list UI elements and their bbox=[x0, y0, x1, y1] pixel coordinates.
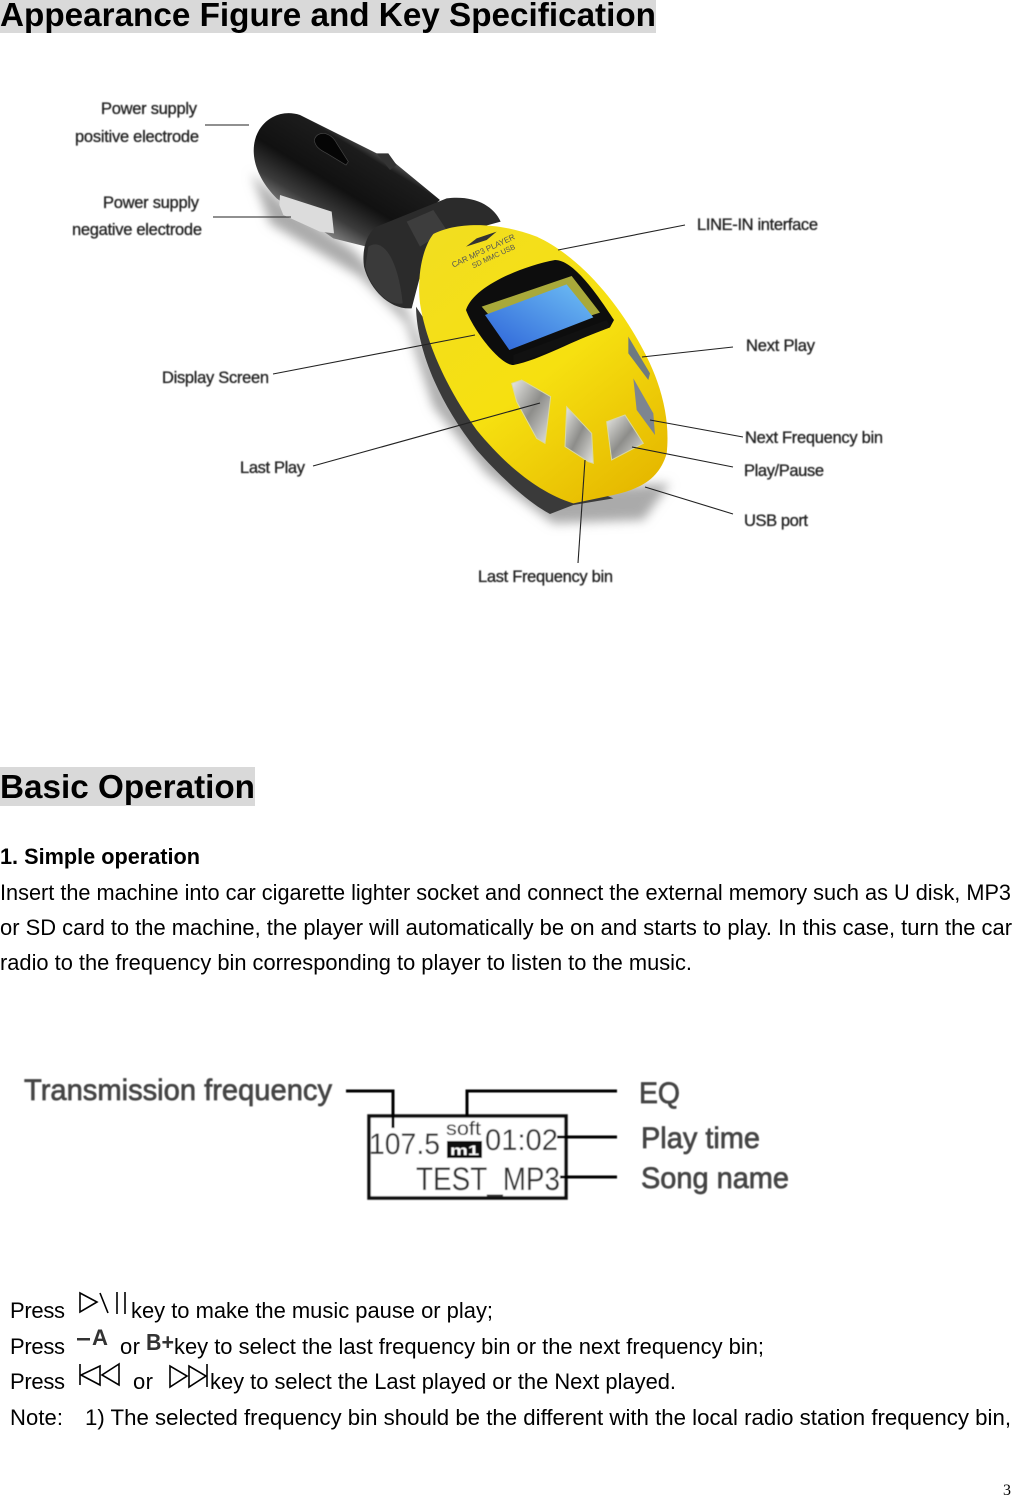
callout labels: Power supply bbox=[103, 194, 200, 212]
illustration: yellow car MP3 player bbox=[252, 113, 670, 523]
label: Play time: Play time bbox=[641, 1122, 760, 1155]
callout labels: Power supply bbox=[101, 100, 198, 118]
instruction: track keys bbox=[10, 1364, 676, 1394]
text block: simple operation: or SD card to the machine, the player will automatically be on and starts to play. In this case, turn the car bbox=[0, 915, 1012, 940]
instruction: frequency keys: A bbox=[92, 1325, 108, 1350]
instruction: track keys: key to select the Last played or the Next played. bbox=[210, 1369, 676, 1394]
instruction: play or pause: key to make the music pause or play; bbox=[131, 1298, 493, 1323]
LCD screen: 107.5 bbox=[369, 1128, 440, 1161]
label: EQ: EQ bbox=[639, 1077, 680, 1110]
label: Song name: Song name bbox=[641, 1162, 789, 1195]
figure: annotated device photo bbox=[72, 100, 883, 586]
callout labels: Play/Pause bbox=[744, 462, 824, 480]
callout labels bbox=[72, 100, 883, 586]
instruction: track keys: Press bbox=[10, 1369, 65, 1394]
illustration: yellow car MP3 player: CAR MP3 PLAYER bbox=[450, 232, 517, 269]
instruction: play or pause: Press bbox=[10, 1298, 65, 1323]
LCD screen: TEST_MP3 bbox=[416, 1161, 560, 1197]
note: 1) The selected frequency bin should be the different with the local radio station frequency bin, bbox=[85, 1405, 1011, 1430]
heading: Basic Operation: Basic Operation bbox=[0, 768, 255, 805]
instruction: frequency keys: or bbox=[120, 1334, 140, 1359]
callout labels: USB port bbox=[744, 512, 808, 530]
callout labels: Next Frequency bin bbox=[745, 429, 883, 447]
text block: simple operation: Insert the machine into car cigarette lighter socket and connect the external memory such as U disk, MP3 bbox=[0, 880, 1011, 905]
illustration: yellow car MP3 player: SD MMC USB bbox=[470, 242, 517, 270]
callout labels: Display Screen bbox=[162, 369, 269, 387]
LCD screen: 01:02 bbox=[485, 1124, 558, 1157]
callout labels: positive electrode bbox=[75, 128, 199, 146]
LCD screen: soft bbox=[446, 1119, 482, 1140]
instruction: frequency keys: Press bbox=[10, 1334, 65, 1359]
label: Transmission frequency: Transmission frequency bbox=[24, 1074, 332, 1107]
callout labels: negative electrode bbox=[72, 221, 202, 239]
callout labels: Last Play bbox=[240, 459, 306, 477]
text block: key instructions bbox=[10, 1292, 1011, 1430]
note: Note: bbox=[10, 1405, 63, 1430]
LCD screen: m1 bbox=[450, 1142, 479, 1158]
callout lines bbox=[205, 125, 743, 563]
instruction: track keys: or bbox=[133, 1369, 153, 1394]
diagram: LCD display layout bbox=[24, 1074, 789, 1198]
LCD screen bbox=[369, 1116, 566, 1198]
instruction: frequency keys bbox=[10, 1325, 764, 1359]
text block: simple operation: radio to the frequency bin corresponding to player to listen to the music. bbox=[0, 950, 692, 975]
instruction: play or pause bbox=[10, 1292, 493, 1323]
callout labels: Last Frequency bin bbox=[478, 568, 613, 586]
callout labels: LINE-IN interface bbox=[697, 216, 818, 234]
instruction: frequency keys: B+ bbox=[146, 1329, 174, 1355]
text block: simple operation: 1. Simple operation bbox=[0, 844, 200, 869]
instruction: frequency keys: key to select the last frequency bin or the next frequency bin; bbox=[174, 1334, 764, 1359]
text block: simple operation bbox=[0, 844, 1012, 975]
leader lines bbox=[346, 1091, 617, 1177]
callout labels: Next Play bbox=[746, 337, 816, 355]
